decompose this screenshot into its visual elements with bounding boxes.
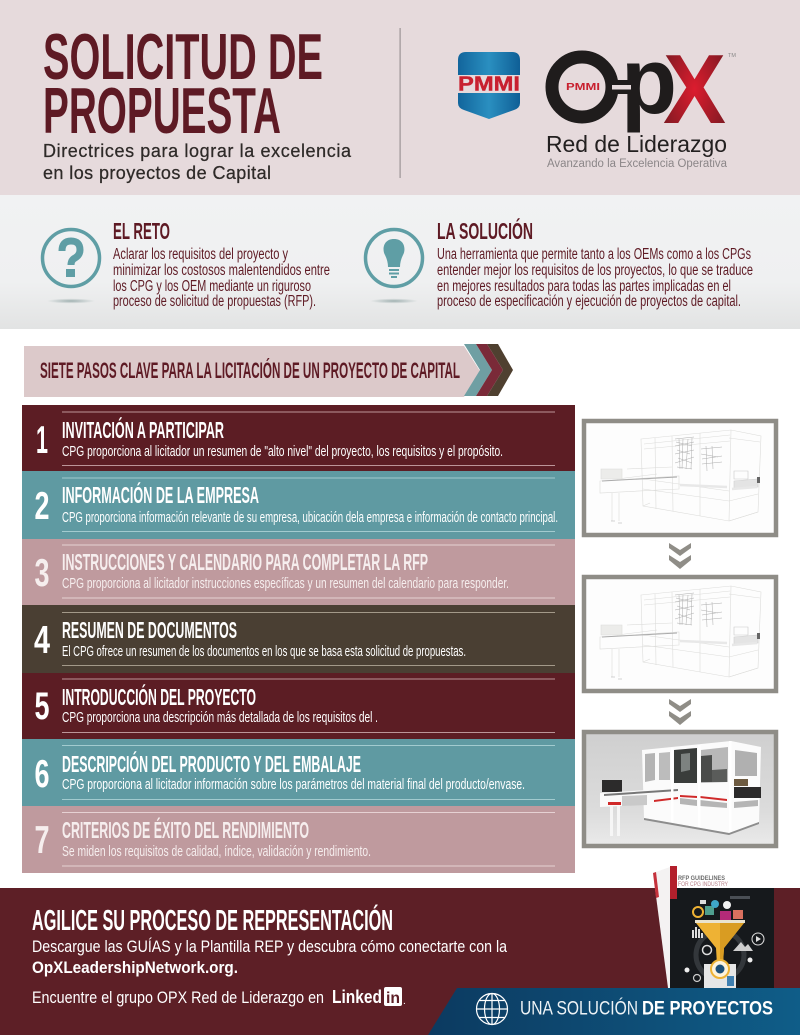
step 3: INSTRUCCIONES Y CALENDARIO PARA COMPLETAR LA RFP [62,549,428,575]
step 4 [22,605,575,673]
step 1: CPG proporciona al licitador un resumen de "alto nivel" del proyecto, los requisitos y el propósito. [62,443,503,460]
step 2 [22,471,575,539]
title [43,20,323,147]
icon: LinkedIn: . [403,996,406,1007]
step 1: INVITACIÓN A PARTICIPAR [62,416,224,443]
logo: PMMI shield: PMMI [458,74,520,96]
footer text block [32,937,507,1007]
icon: light bulb [366,230,422,304]
step 3: 3 [34,552,50,595]
footer text block: OpXLeadershipNetwork.org. [32,958,238,977]
step 4: 4 [34,619,50,662]
step 4: RESUMEN DE DOCUMENTOS [62,617,237,643]
icon: LinkedIn: Linked [332,987,382,1007]
logo: OpX: PMMI [566,81,600,93]
arrow: double chevron down [669,543,691,569]
text block: el reto: EL RETO [113,218,170,244]
image frame: rendered machine [584,732,776,846]
footer text block: Encuentre el grupo OPX Red de Liderazgo en [32,988,324,1007]
footer heading: AGILICE SU PROCESO DE REPRESENTACIÓN [32,903,393,937]
step 5 [22,673,575,739]
logo: OpX: p [621,28,677,133]
logo: OpX: X [663,34,726,144]
book cover: RFP guidelines: FOR CPG INDUSTRY [678,882,728,888]
footer bar: project solution: DE PROYECTOS [642,998,773,1020]
logo text: Red de Liderazgo: Red de Liderazgo [546,131,727,157]
subtitle [43,141,352,183]
logo: PMMI shield [458,52,520,119]
step 7: CRITERIOS DE ÉXITO DEL RENDIMIENTO [62,816,309,843]
footer bar: project solution: UNA SOLUCIÓN [520,998,638,1020]
step 6: 6 [34,753,50,796]
step 2: 2 [34,485,50,528]
logo: OpX: TM [728,53,736,59]
text block: el reto [113,218,330,310]
step 2: INFORMACIÓN DE LA EMPRESA [62,481,259,508]
arrow: double chevron down [669,699,691,725]
step 3: CPG proporciona al licitador instrucciones específicas y un resumen del calendario para responder. [62,575,509,592]
logo tagline: Avanzando la Excelencia Operativa [547,158,728,170]
step 7: Se miden los requisitos de calidad, índice, validación y rendimiento. [62,843,371,860]
logo: OpX [552,28,736,144]
book cover: RFP guidelines: RFP GUIDELINES [678,875,726,882]
icon: LinkedIn: in [386,990,400,1007]
step 4: El CPG ofrece un resumen de los documentos en los que se basa esta solicitud de propuestas. [62,643,466,660]
step 3 [22,539,575,605]
footer bar: project solution [428,988,800,1035]
panel: challenge and solution background [0,195,800,329]
text block: el reto: Aclarar los requisitos del proyecto y [113,246,288,263]
step 5: INTRODUCCIÓN DEL PROYECTO [62,683,256,710]
subtitle: Directrices para lograr la excelencia [43,141,352,161]
subtitle: en los proyectos de Capital [43,163,271,183]
text block: el reto: minimizar los costosos malentendidos entre [113,262,330,279]
image frame: machine line drawing with shading [584,577,776,691]
step 5: CPG proporciona una descripción más detallada de los requisitos del . [62,709,378,726]
title: PROPUESTA [43,74,281,147]
step 1: 1 [36,419,48,462]
text block: la solucion [437,217,753,310]
panel: footer background [0,888,800,1035]
text block: el reto: los CPG y los OEM mediante un riguroso [113,278,311,295]
icon: globe [476,994,508,1024]
step 6 [22,739,575,806]
step 5: 5 [34,685,50,728]
footer text block: Descargue las GUÍAS y la Plantilla REP y descubra cómo conectarte con la [32,937,507,956]
text block: la solucion: LA SOLUCIÓN [437,217,533,244]
step 6: CPG proporciona al licitador información sobre los parámetros del material final del producto/envase. [62,776,525,793]
text block: el reto: proceso de solicitud de propuestas (RFP). [113,293,316,310]
icon: question mark [42,230,100,304]
step 7: 7 [34,819,50,862]
image frame: machine line drawing [584,421,776,535]
book cover: RFP guidelines [653,866,774,988]
step 1 [22,405,575,471]
title: SOLICITUD DE [43,20,323,93]
step 6: DESCRIPCIÓN DEL PRODUCTO Y DEL EMBALAJE [62,750,361,777]
banner: seven key steps [24,344,513,397]
step 7 [22,806,575,873]
panel: header background [0,0,800,195]
